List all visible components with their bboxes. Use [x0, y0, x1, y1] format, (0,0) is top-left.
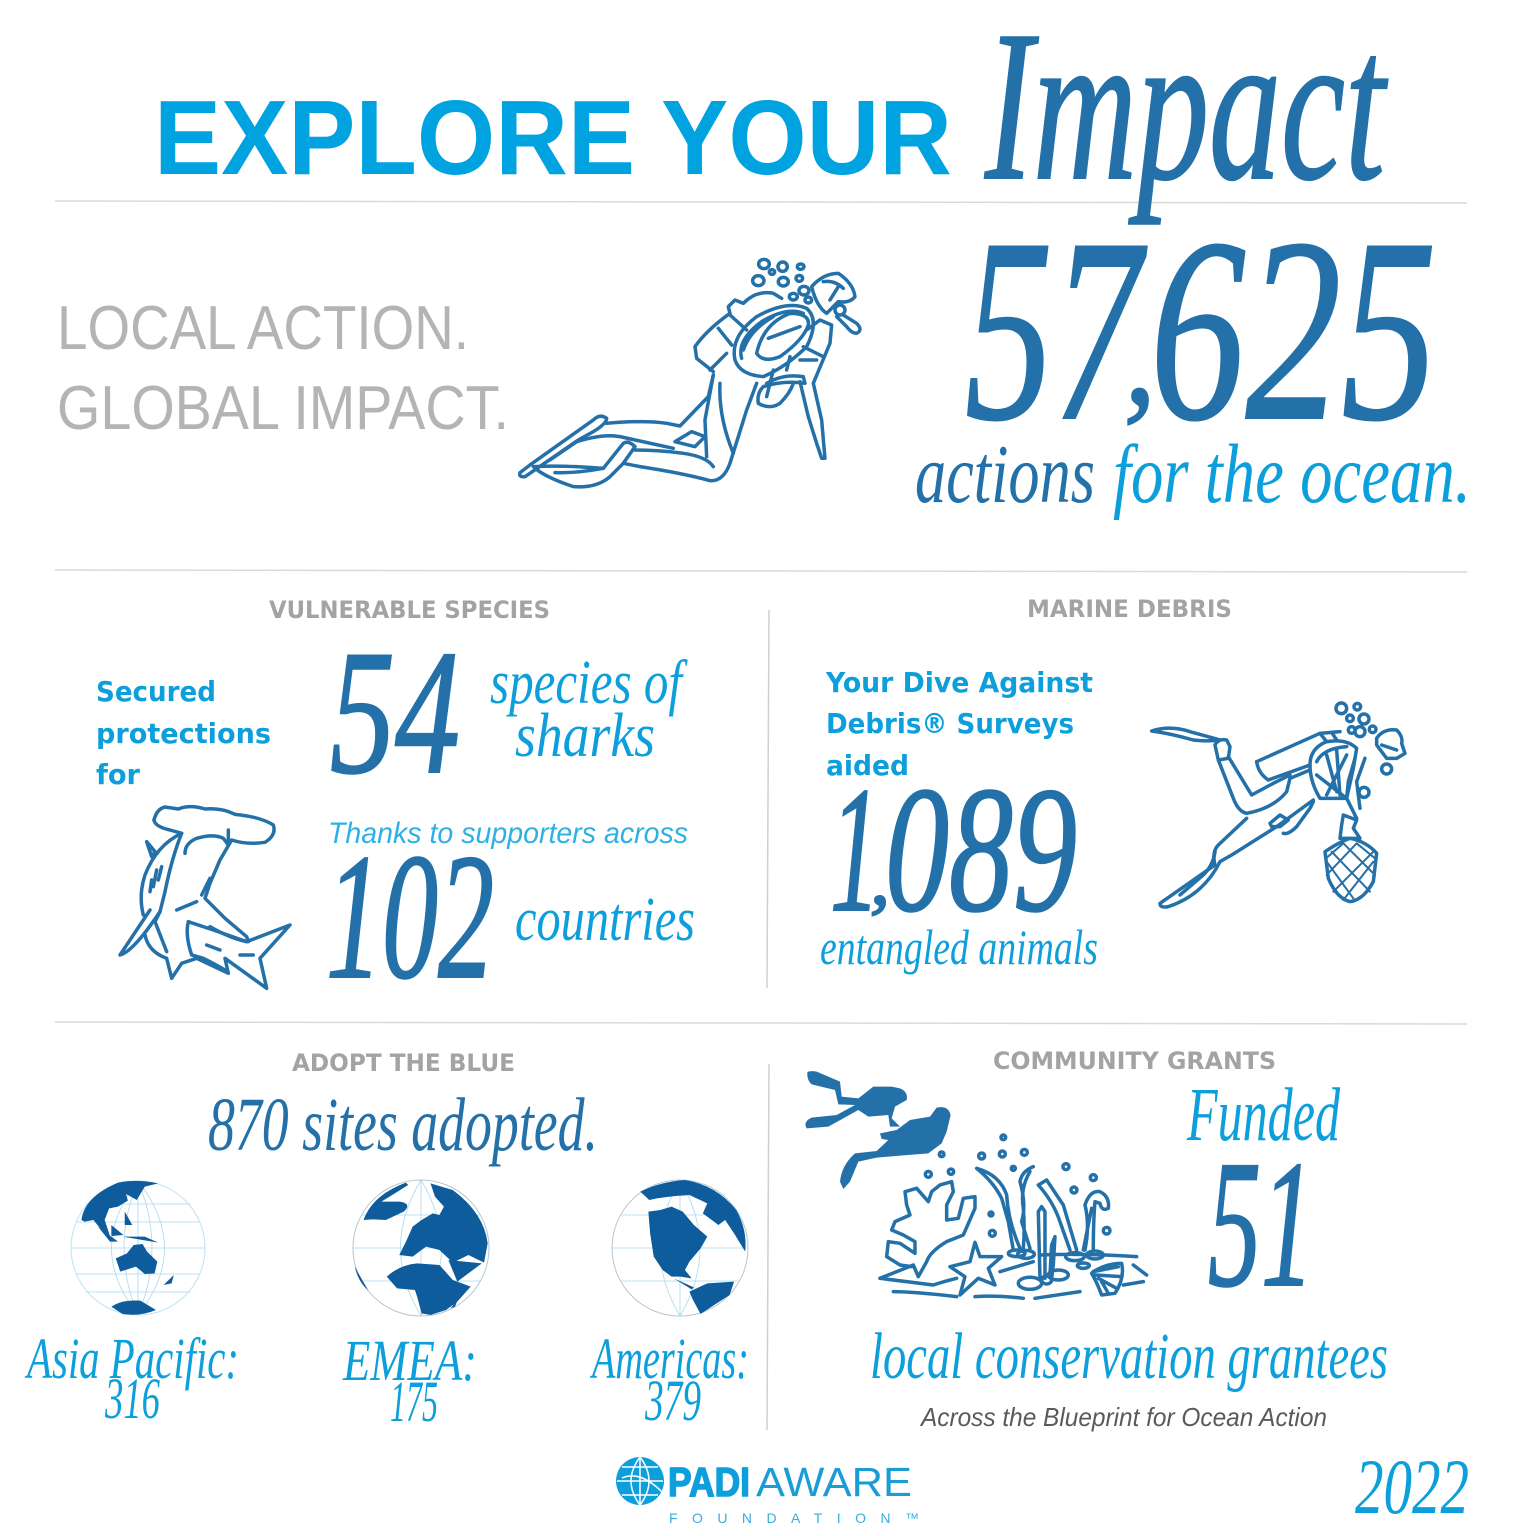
number: 54: 54 [330, 613, 460, 811]
heading: adopt the blue: ADOPT THE BLUE [292, 1049, 515, 1077]
number: 102: 102 [326, 817, 494, 1016]
text: funded: Funded [1186, 1073, 1341, 1157]
big number: 57,625: , [1124, 279, 1156, 434]
logo: padi aware foundation: FOUNDATION™ [669, 1510, 919, 1526]
year: 2022 [1355, 1443, 1469, 1530]
tagline [57, 294, 509, 443]
caption: actions for the ocean: actions [915, 428, 1095, 521]
text: entangled animals: entangled animals [820, 919, 1098, 975]
icon: coral reef [880, 1135, 1147, 1298]
panel: community grants [805, 1047, 1388, 1432]
label: americas: Americas: [589, 1326, 749, 1391]
label: asia pacific: Asia Pacific: [24, 1326, 239, 1391]
text: your dive against debris [825, 666, 1093, 782]
text: secured protections for [96, 675, 271, 791]
globe: asia pacific [71, 1181, 205, 1315]
number: 1,089: , [870, 838, 890, 921]
big number: 57,625: 57 [965, 185, 1149, 475]
icon: hammerhead shark [120, 807, 290, 988]
heading: vulnerable species: VULNERABLE SPECIES [269, 596, 550, 624]
text: species of sharks [490, 649, 688, 770]
number: 51: 51 [1208, 1124, 1314, 1325]
text: your dive against debris: aided [826, 749, 909, 782]
text: species of sharks: sharks [515, 702, 655, 770]
text: secured protections for: protections [96, 717, 271, 750]
panel: vulnerable species [96, 596, 695, 1016]
label: emea [342, 1328, 477, 1434]
text: 870 sites adopted: 870 sites adopted. [208, 1083, 598, 1167]
logo: padi aware foundation: AWARE [756, 1459, 912, 1505]
number: 1,089 [830, 750, 1077, 949]
text: thanks to supporters: Thanks to supporters across [328, 817, 688, 850]
globe: emea [353, 1180, 489, 1316]
caption: actions for the ocean [915, 428, 1471, 521]
number: 1,089: 089 [885, 750, 1077, 949]
text: secured protections for: for [96, 758, 140, 791]
text: your dive against debris: Debris® Surveys [826, 707, 1074, 740]
panel: adopt the blue [24, 1049, 749, 1434]
icon: diver with tank [520, 259, 860, 487]
text: countries: countries [515, 886, 695, 954]
icon: two divers silhouette [805, 1071, 951, 1189]
number: 1,089: 1 [830, 750, 880, 949]
big number: 57,625 [965, 185, 1437, 475]
panel: marine debris [820, 595, 1405, 975]
label: emea: EMEA: [342, 1328, 477, 1393]
text: species of sharks: species of [490, 649, 688, 717]
title [154, 0, 1389, 225]
heading: community grants: COMMUNITY GRANTS [993, 1047, 1276, 1075]
logo: padi aware foundation: PADI [668, 1459, 750, 1505]
globe: americas [612, 1180, 748, 1316]
tagline: GLOBAL IMPACT. [57, 374, 509, 443]
icon: diver with net bag [1152, 703, 1405, 907]
label: americas [589, 1326, 749, 1433]
big number: 57,625: 625 [1150, 185, 1437, 475]
label: americas: 379 [644, 1368, 701, 1433]
logo: padi aware foundation [616, 1457, 919, 1526]
heading: marine debris: MARINE DEBRIS [1027, 595, 1232, 623]
text: your dive against debris: Your Dive Against [825, 666, 1093, 699]
label: emea: 175 [390, 1369, 438, 1434]
label: asia pacific: 316 [104, 1366, 160, 1431]
text: secured protections for: Secured [96, 675, 216, 708]
text: across the blueprint: Across the Blueprint for Ocean Action [919, 1402, 1327, 1432]
label: asia pacific [24, 1326, 239, 1431]
title: EXPLORE YOUR [154, 79, 952, 197]
tagline: LOCAL ACTION. [57, 294, 469, 363]
